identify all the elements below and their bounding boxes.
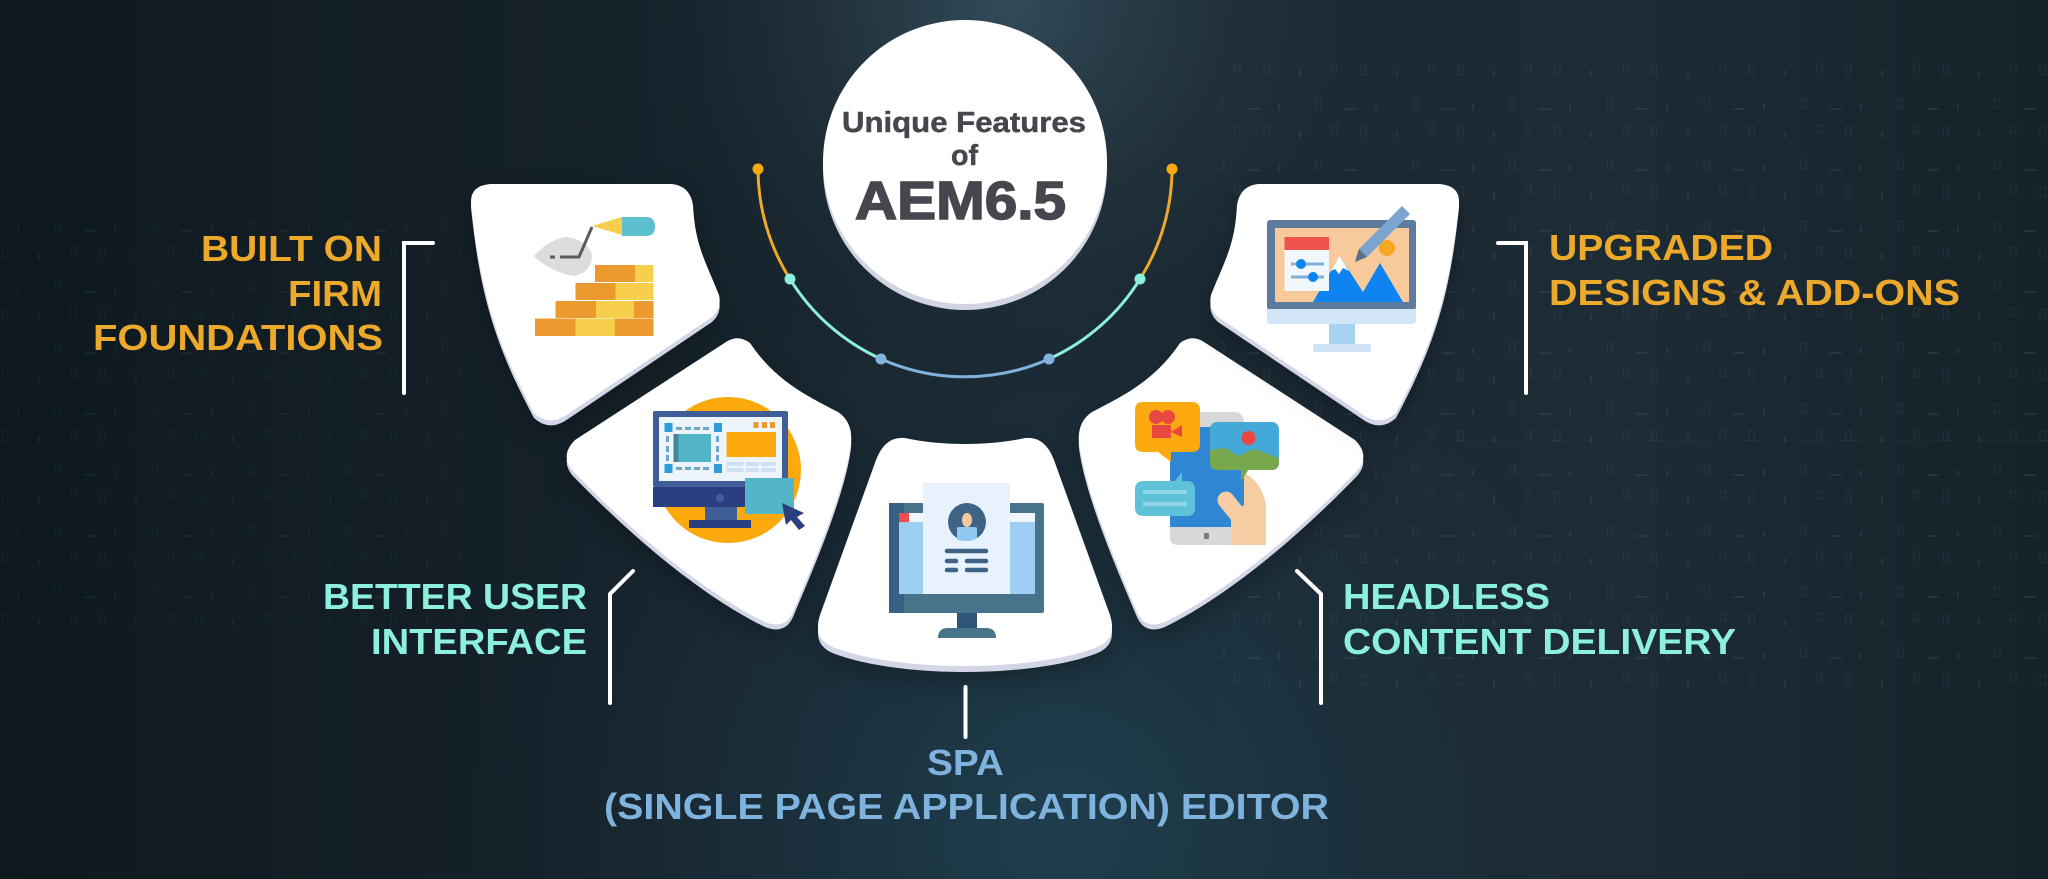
arc connector with dots	[752, 164, 1178, 377]
label: built on firm foundations: FIRM	[288, 273, 382, 314]
label: upgraded designs and add-ons: DESIGNS & ADD-ONS	[1549, 272, 1960, 313]
icon: phone with message bubbles	[1135, 402, 1279, 545]
label: upgraded designs and add-ons: UPGRADED	[1549, 227, 1773, 268]
panel: better user interface	[567, 338, 851, 629]
icon: monitor with profile page	[889, 483, 1044, 638]
icon: monitor with interface layout	[653, 397, 805, 543]
central title circle	[823, 20, 1107, 310]
title: unique features of	[842, 107, 1086, 172]
label: headless content delivery: CONTENT DELIVERY	[1343, 621, 1736, 662]
label: built on firm foundations: BUILT ON	[201, 228, 382, 269]
label: headless content delivery	[1297, 571, 1736, 703]
label: spa single page application editor	[604, 687, 1329, 827]
label: spa single page application editor: (SINGLE PAGE APPLICATION) EDITOR	[604, 786, 1329, 827]
panel: headless content delivery	[1079, 338, 1363, 629]
title: AEM6.5: AEM6.5	[855, 171, 1066, 231]
icon: design monitor with pencil	[1267, 206, 1416, 352]
label: headless content delivery: HEADLESS	[1343, 576, 1550, 617]
panel: upgraded designs and add-ons	[1210, 184, 1459, 425]
label: better user interface	[323, 571, 633, 703]
label: better user interface: INTERFACE	[371, 621, 587, 662]
label: built on firm foundations	[93, 228, 433, 393]
label: spa single page application editor: SPA	[927, 742, 1004, 783]
panel: built on firm foundations	[471, 184, 720, 425]
icon: trowel and bricks	[534, 217, 655, 336]
label: better user interface: BETTER USER	[323, 576, 587, 617]
title: unique features of: of	[951, 140, 978, 172]
panel: spa editor	[818, 438, 1112, 672]
title: unique features of: Unique Features	[842, 107, 1086, 139]
label: upgraded designs and add-ons	[1498, 227, 1960, 393]
label: built on firm foundations: FOUNDATIONS	[93, 317, 383, 358]
